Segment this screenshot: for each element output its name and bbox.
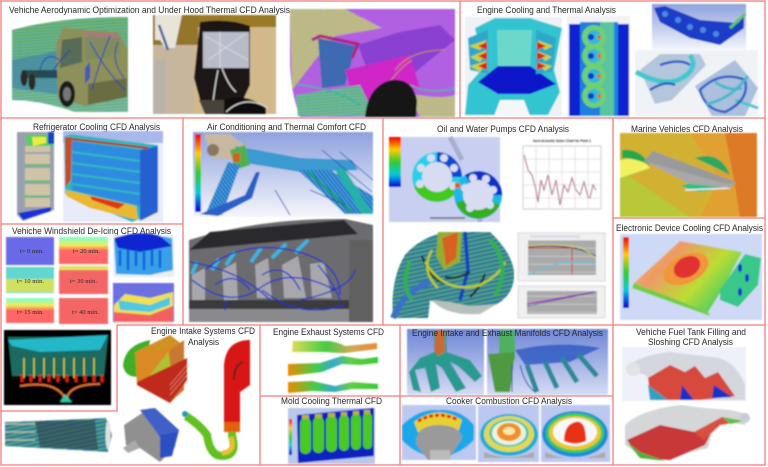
image: gear pump pressure	[389, 137, 502, 222]
heading: manifolds: Engine Intake and Exhaust Manifolds CFD Analysis	[412, 328, 604, 338]
panel: marine vehicles	[620, 124, 757, 217]
image: sloshing tank	[622, 347, 746, 401]
image: marine hull pressure field	[620, 133, 757, 217]
image: filling tank	[625, 405, 750, 461]
chart: pump performance curve	[518, 233, 605, 281]
image: exhaust pipe bottom	[288, 381, 378, 393]
heading: cooker combustion: Cooker Combustion CFD Analysis	[446, 396, 573, 406]
heading: electronic device cooling: Electronic Device Cooling CFD Analysis	[616, 223, 764, 233]
heading: engine intake second line: Analysis	[188, 337, 220, 347]
heading: engine exhaust: Engine Exhaust Systems CFD	[273, 327, 384, 337]
heading: windshield de-icing: Vehiche Windshield De-Icing CFD Analysis	[12, 226, 172, 236]
panel: oil and water pumps	[389, 124, 605, 318]
heading: engine cooling: Engine Cooling and Thermal Analysis	[477, 5, 617, 15]
heading: air conditioning: Air Conditioning and Thermal Comfort CFD	[207, 122, 366, 132]
panel: engine exhaust systems	[273, 327, 384, 393]
labels: de-icing times: t= 20 min.	[73, 248, 100, 255]
labels: de-icing times: t= 15 min.	[17, 309, 44, 316]
image: truck streamlines	[12, 17, 128, 112]
image: burner top	[478, 405, 539, 462]
panel: engine intake systems	[123, 326, 255, 462]
panel: air conditioning and thermal comfort	[189, 122, 373, 322]
panel: intake and exhaust manifolds	[407, 328, 608, 395]
image: air conditioning duct flow	[193, 132, 373, 217]
image: coolant jacket top	[652, 4, 746, 50]
image: manifold streamlines	[487, 329, 608, 395]
image: under hood streamlines	[290, 9, 455, 117]
labels: de-icing times: t= 0 min.	[20, 248, 44, 255]
heading: engine intake: Engine Intake Systems CFD	[151, 326, 255, 336]
image: exhaust pipe top	[292, 341, 377, 353]
image: refrigerator shell	[63, 131, 163, 222]
image: engine block temperature	[465, 17, 562, 116]
heading: fuel tank: Vehiche Fuel Tank Filling and	[636, 327, 746, 337]
panel: engine cooling and thermal analysis	[465, 4, 758, 118]
panel: cooker combustion	[402, 396, 610, 462]
heading: marine vehicles: Marine Vehicles CFD Analysis	[631, 124, 744, 134]
labels: de-icing times: t= 30 min.	[70, 278, 97, 285]
image: refrigerator interior	[17, 132, 54, 221]
heading: refrigerator: Refrigerator Cooling CFD Analysis	[33, 122, 161, 132]
image: manifold bare	[407, 329, 484, 395]
chart: acoustic noise: Aero-Acoustic Noise Chart for Point 1	[533, 139, 591, 143]
image: duct swirl streamlines	[5, 418, 112, 452]
image: black background vent flow	[4, 330, 111, 405]
panel: vehicle aerodynamic optimization	[9, 5, 455, 117]
image: mold temperature	[288, 408, 375, 464]
heading: mold cooling: Mold Cooling Thermal CFD	[281, 396, 382, 406]
image: intake box	[123, 335, 187, 403]
image: de-icing time frames	[6, 237, 108, 324]
image: windshield defrost contour	[113, 283, 174, 324]
image: coolant jacket flow	[635, 50, 758, 116]
labels: de-icing times	[17, 248, 100, 316]
panel: electronic device cooling	[616, 223, 764, 320]
image: burner section	[402, 405, 476, 460]
image: pump impeller streamlines	[392, 232, 514, 318]
image: intake housing	[123, 408, 179, 462]
labels: de-icing times: t= 10 min.	[17, 278, 44, 285]
chart: pump linear curve	[518, 286, 605, 318]
heading: oil and water pumps: Oil and Water Pumps CFD Analysis	[437, 124, 570, 134]
image: burner flames	[541, 405, 610, 462]
heading: fuel tank second line: Sloshing CFD Analysis	[648, 337, 734, 347]
image: exhaust pipe middle	[288, 356, 378, 376]
image: long intake pipe	[182, 340, 250, 456]
image: electronic device temperature	[620, 234, 762, 320]
chart: acoustic noise	[523, 139, 601, 209]
heading: aero: Vehiche Aerodynamic Optimization and Under Hood Thermal CFD Analysis	[9, 5, 291, 15]
panel: refrigerator cooling	[17, 122, 163, 222]
image: air duct outlet streamlines	[189, 219, 373, 322]
image: under hood test photo	[153, 15, 276, 114]
image: defrost vent flow	[113, 233, 174, 277]
image: cylinder head temperature	[567, 16, 630, 118]
panel: mold cooling thermal	[281, 396, 382, 464]
panel: windshield de-icing	[6, 226, 174, 324]
labels: de-icing times: t= 40 min.	[72, 309, 99, 316]
panel: fuel tank filling and sloshing	[622, 327, 750, 461]
